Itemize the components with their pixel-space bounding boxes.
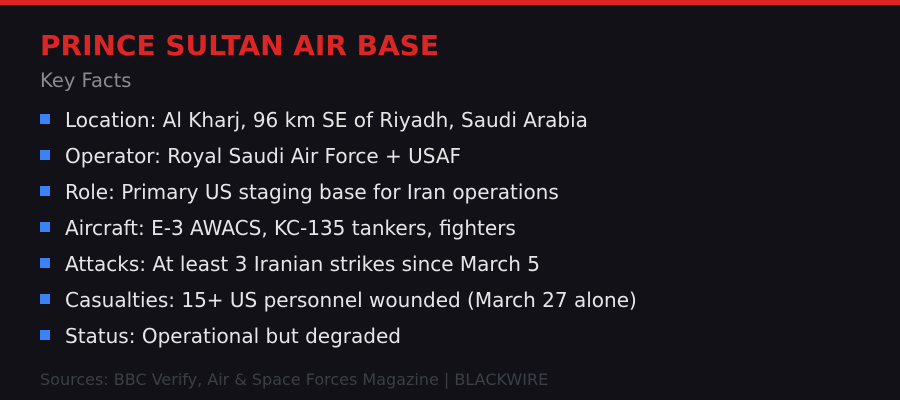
fact: location: Location: Al Kharj, 96 km SE of Riyadh, Saudi Arabia (65, 108, 588, 132)
fact: status: Status: Operational but degraded (65, 324, 401, 348)
fact: aircraft: Aircraft: E-3 AWACS, KC-135 tankers, fighters (65, 216, 516, 240)
top accent bar (0, 0, 900, 5)
fact: role: Role: Primary US staging base for Iran operations (65, 180, 559, 204)
fact: casualties: Casualties: 15+ US personnel wounded (March 27 alone) (65, 288, 637, 312)
fact: operator: Operator: Royal Saudi Air Force + USAF (65, 144, 461, 168)
subtitle: Key Facts (40, 69, 131, 92)
title: PRINCE SULTAN AIR BASE (40, 29, 439, 62)
fact: attacks: Attacks: At least 3 Iranian strikes since March 5 (65, 252, 540, 276)
footer sources: Sources: BBC Verify, Air & Space Forces Magazine | BLACKWIRE (40, 370, 548, 389)
fact list (40, 108, 637, 348)
